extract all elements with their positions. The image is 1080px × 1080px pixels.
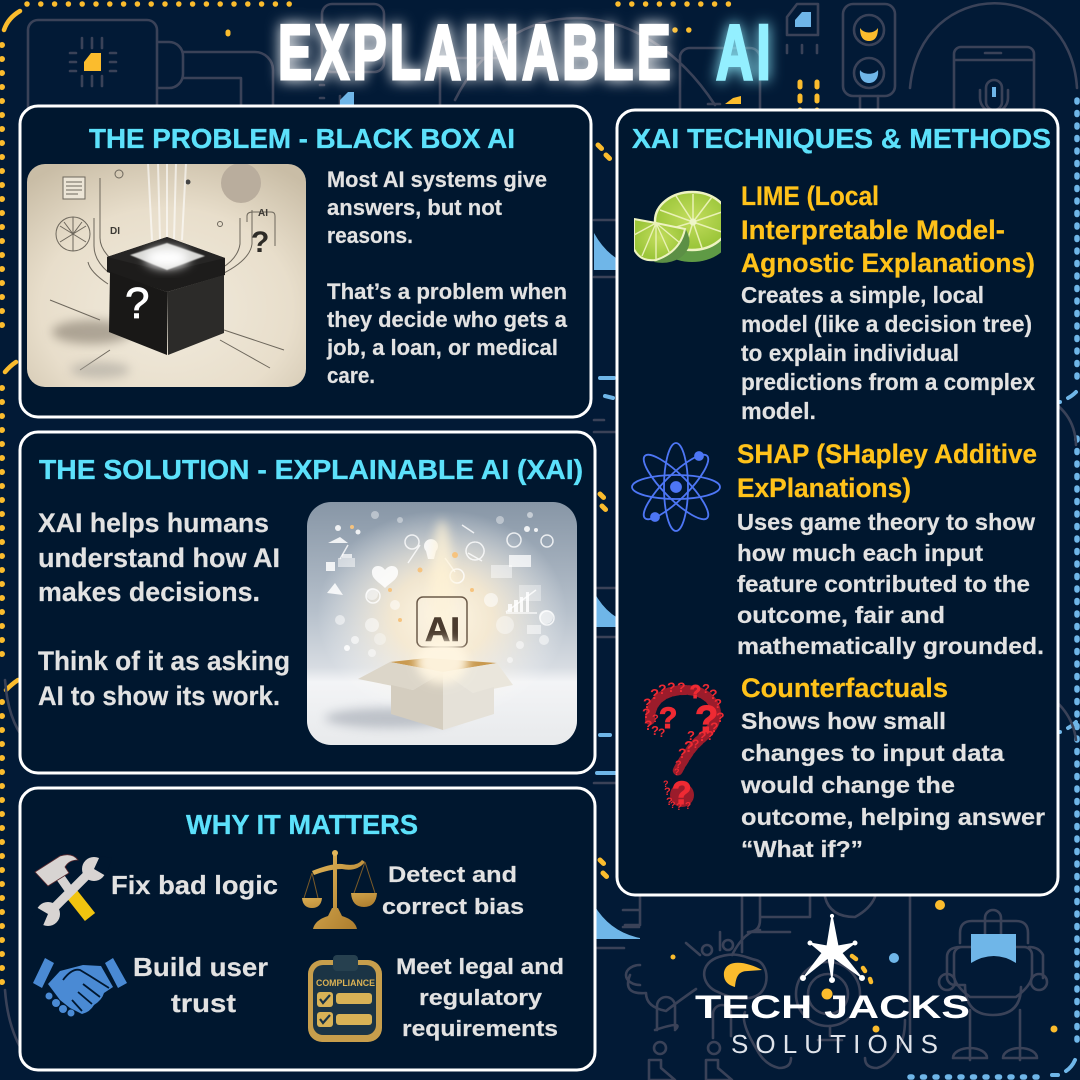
icon: question mark of question marks: ?	[658, 681, 667, 697]
icon: question mark of question marks: ?	[710, 719, 719, 735]
icon: question mark of question marks: ?	[658, 726, 665, 740]
icon: question mark of question marks: ?	[652, 713, 659, 725]
icon: question mark of question marks: ?	[674, 767, 680, 777]
text: counterfactuals: would change the	[740, 772, 955, 798]
text: LIME: Agnostic Explanations)	[741, 248, 1035, 278]
text: SHAP	[737, 439, 1044, 659]
text: counterfactuals	[740, 673, 1045, 862]
text: SHAP: Uses game theory to show	[737, 509, 1035, 535]
text: detect and correct bias	[382, 862, 524, 919]
text: LIME: to explain individual	[741, 340, 959, 366]
text: LIME: predictions from a complex	[741, 369, 1035, 395]
icon: question mark of question marks: ?	[692, 737, 699, 751]
heading: the solution: THE SOLUTION - EXPLAINABLE AI (XAI)	[39, 454, 583, 485]
text: counterfactuals: Shows how small	[741, 708, 946, 734]
icon: compliance clipboard	[308, 955, 382, 1042]
text: the problem: they decide who gets a	[327, 307, 568, 332]
text: the problem: That’s a problem when	[327, 279, 567, 304]
text: the problem	[326, 167, 568, 388]
text: LIME: LIME (Local	[741, 181, 879, 211]
icon: star	[800, 914, 864, 982]
heading: why it matters: WHY IT MATTERS	[186, 809, 418, 840]
image: open box: AI	[425, 611, 460, 649]
text: the solution: makes decisions.	[38, 577, 260, 607]
top-right chip	[787, 4, 818, 53]
title: EXPLAINABLE	[278, 8, 674, 96]
image: black box	[27, 163, 306, 387]
text: LIME: model (like a decision tree)	[741, 311, 1032, 337]
AI badge	[417, 597, 467, 647]
icon: question mark of question marks: ?	[650, 686, 659, 703]
text: meet legal	[396, 954, 564, 1041]
text: SHAP: outcome, fair and	[737, 602, 945, 628]
icon: question mark of question marks: ?	[684, 739, 694, 756]
text: counterfactuals: outcome, helping answer	[741, 804, 1045, 830]
text: meet legal: regulatory	[419, 985, 543, 1010]
icon: question mark of question marks: ?	[663, 779, 668, 789]
icon: question mark of question marks: ?	[698, 728, 707, 744]
icon: compliance clipboard: COMPLIANCE	[316, 978, 375, 989]
image: open box	[307, 502, 577, 745]
text: meet legal: Meet legal and	[396, 954, 564, 979]
panel: techniques	[617, 110, 1058, 895]
text: SHAP: mathematically grounded.	[737, 633, 1044, 659]
icon: question mark of question marks: ?	[709, 686, 718, 702]
text: SHAP: ExPlanations)	[737, 473, 911, 503]
logo: Tech Jacks Solutions: TECH JACKS	[695, 989, 970, 1025]
yellow dotted border	[27, 4, 740, 30]
text: the solution: AI to show its work.	[38, 681, 280, 711]
icon: question mark of question marks: ?	[667, 679, 676, 695]
text: the problem: Most AI systems give	[327, 167, 547, 192]
mid column shapes	[594, 233, 640, 939]
lower right line art	[623, 897, 910, 1080]
text: the problem: job, a loan, or medical	[326, 335, 558, 360]
blue dotted border	[910, 100, 1077, 1077]
icon: question mark of question marks: ?	[690, 682, 701, 702]
text: counterfactuals: Counterfactuals	[741, 673, 948, 703]
icon: scales	[302, 850, 377, 929]
icon: question mark of question marks: ?	[716, 709, 725, 725]
icon: question mark of question marks: ?	[659, 702, 677, 735]
text: the solution	[38, 508, 290, 711]
icon: question mark of question marks: ?	[666, 796, 673, 808]
text: counterfactuals: “What if?”	[741, 836, 863, 862]
text: the solution: understand how AI	[38, 543, 280, 573]
text: fix bad logic: Fix bad logic	[111, 870, 278, 900]
icon: question mark of question marks: ?	[677, 679, 686, 695]
icon: question mark of question marks: ?	[670, 800, 676, 810]
text: LIME: Interpretable Model-	[741, 215, 1005, 245]
icon: question mark of question marks: ?	[685, 801, 691, 812]
text: the problem: answers, but not	[327, 195, 503, 220]
icon: question mark of question marks: ?	[676, 802, 682, 813]
text: build user trust	[133, 952, 268, 1018]
text: build user trust: Build user	[133, 952, 268, 982]
text: detect and correct bias: correct bias	[382, 894, 524, 919]
text: the solution: XAI helps humans	[38, 508, 269, 538]
text: the problem: care.	[327, 363, 375, 388]
text: counterfactuals: changes to input data	[741, 740, 1004, 766]
text: LIME: Creates a simple, local	[741, 282, 984, 308]
text: the problem: reasons.	[327, 223, 413, 248]
icon: lime	[634, 192, 731, 263]
panel: why it matters	[20, 788, 595, 1070]
text: the solution: Think of it as asking	[38, 646, 290, 676]
image: black box: DI	[110, 226, 120, 237]
icon: question mark of question marks: ?	[672, 775, 692, 811]
icon: question mark of question marks	[642, 679, 725, 813]
heading: the problem: THE PROBLEM - BLACK BOX AI	[89, 123, 515, 154]
icon: question mark of question marks: ?	[664, 786, 671, 798]
text: SHAP: feature contributed to the	[737, 571, 1030, 597]
text: SHAP: how much each input	[737, 540, 983, 566]
icon: question mark of question marks: ?	[675, 759, 682, 771]
heading: techniques: XAI TECHNIQUES & METHODS	[632, 123, 1051, 154]
logo: Tech Jacks Solutions	[695, 914, 970, 1059]
title: AI	[716, 8, 774, 96]
logo: Tech Jacks Solutions: SOLUTIONS	[731, 1029, 938, 1059]
icon: handshake	[33, 958, 127, 1016]
image: black box: ?	[125, 279, 149, 328]
text: LIME: model.	[741, 398, 816, 424]
panel: the problem	[20, 106, 591, 417]
icon: question mark of question marks: ?	[687, 728, 695, 743]
icon: question mark of question marks: ?	[706, 728, 714, 743]
text: detect and correct bias: Detect and	[388, 862, 517, 887]
icon: question mark of question marks: ?	[642, 705, 651, 721]
text: SHAP: SHAP (SHapley Additive	[737, 439, 1037, 469]
icon: question mark of question marks: ?	[714, 696, 722, 711]
icon: question mark of question marks: ?	[643, 695, 652, 711]
icon: question mark of question marks: ?	[678, 745, 687, 761]
panel: the solution	[20, 432, 595, 773]
image: black box: ?	[251, 226, 269, 259]
icon: atom	[632, 443, 720, 531]
icon: question mark of question marks: ?	[644, 717, 653, 733]
icon: question mark of question marks: ?	[651, 723, 659, 738]
icon: hammer and wrench	[30, 855, 112, 928]
image: black box: AI	[258, 208, 268, 219]
text: LIME	[741, 181, 1035, 424]
text: meet legal: requirements	[402, 1016, 558, 1041]
text: build user trust: trust	[171, 988, 236, 1018]
icon: question mark of question marks: ?	[702, 681, 710, 696]
icon: question mark of question marks: ?	[695, 699, 718, 741]
